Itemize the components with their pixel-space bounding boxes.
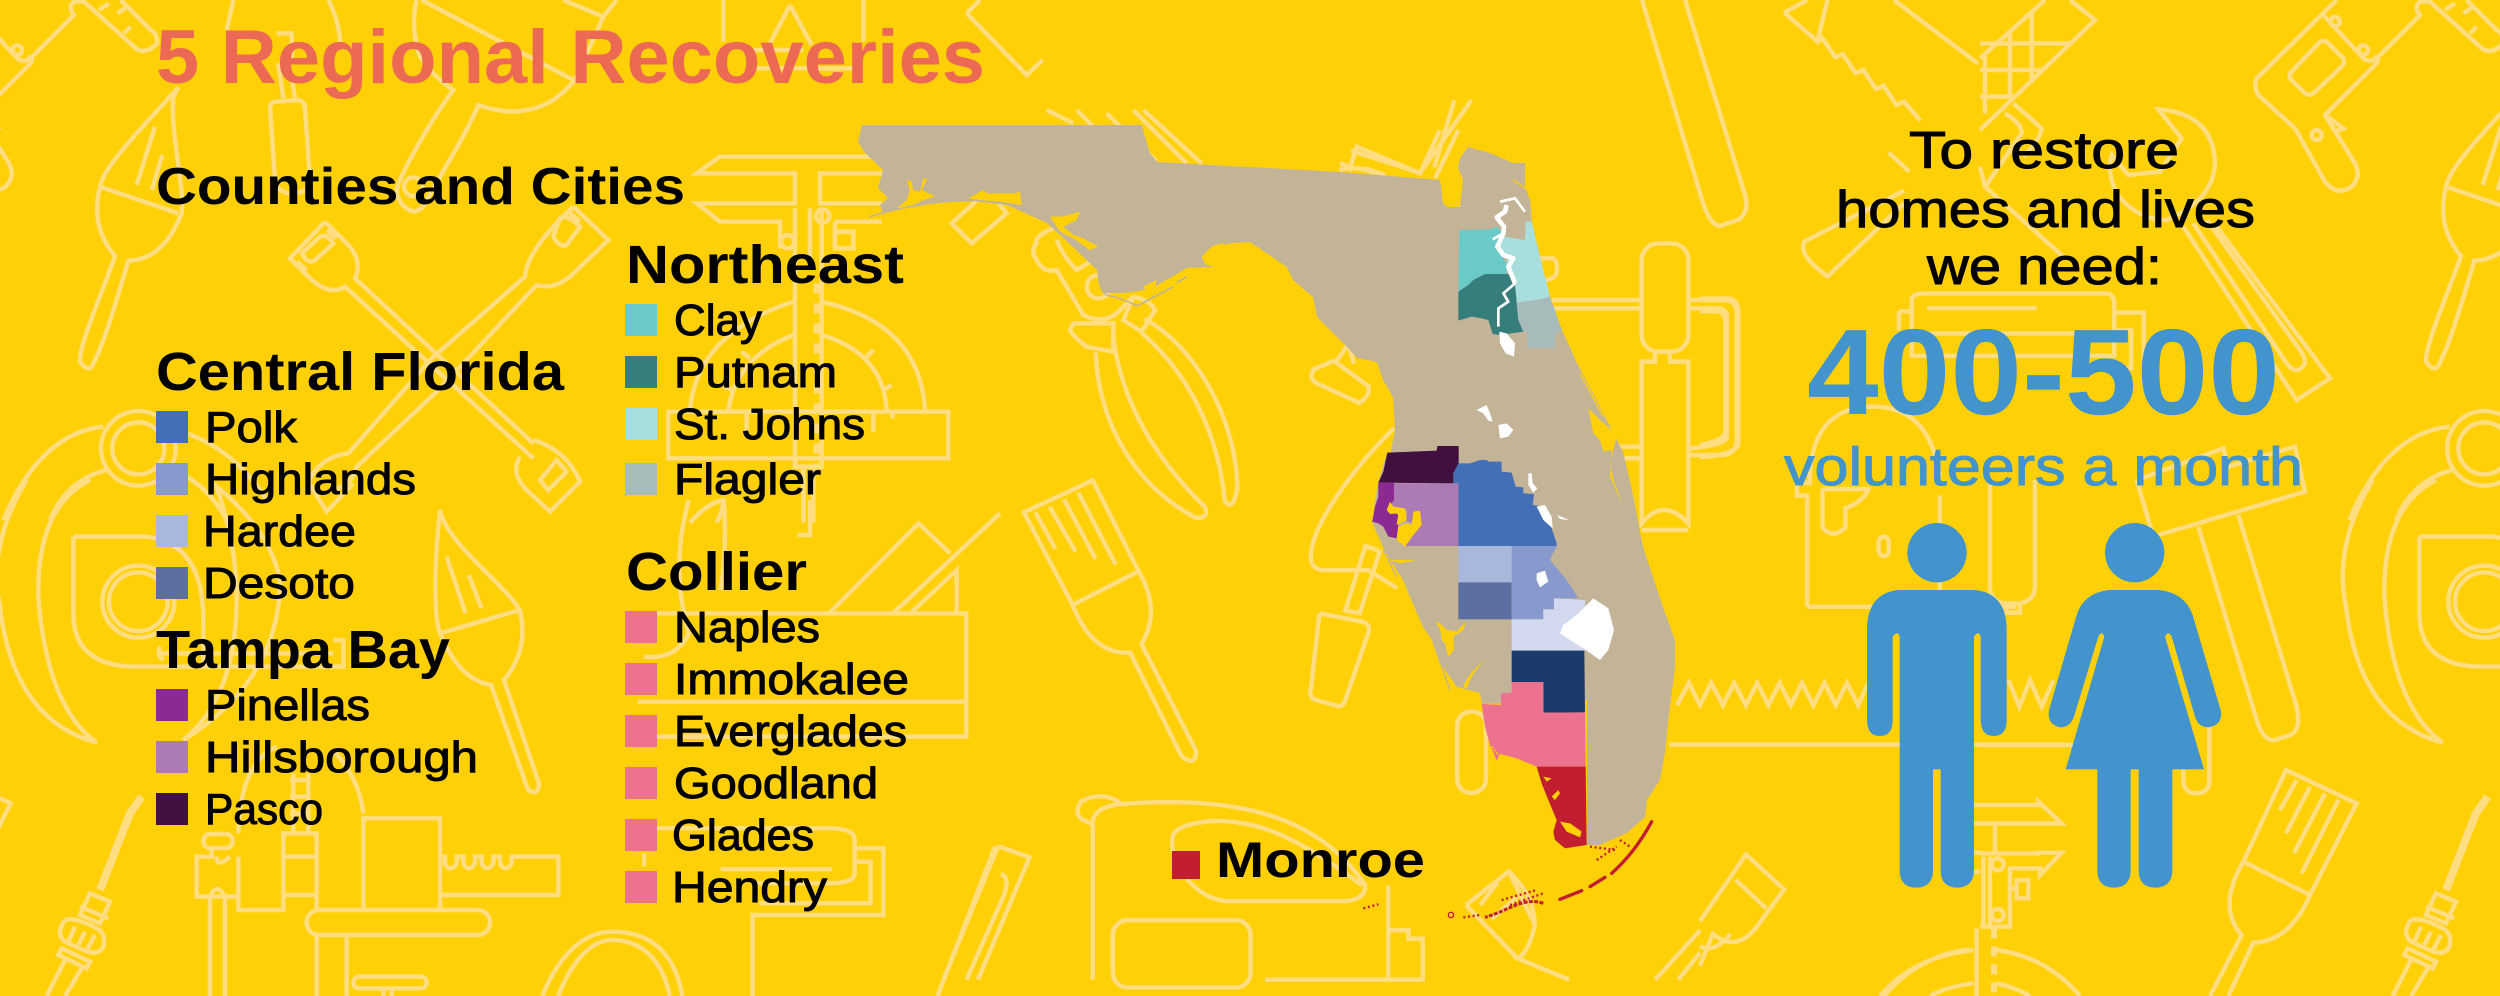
crossed tools xyxy=(290,222,533,458)
repeat of the tile at left edge xyxy=(0,0,157,996)
tools: roller, caliper and brush at lower right xyxy=(1880,447,2357,996)
legend: Collier: Goodland xyxy=(674,759,878,808)
legend: Central Florida xyxy=(156,342,565,608)
legend: Collier: Hendry xyxy=(672,863,827,912)
repeat of the tile at right edge xyxy=(2343,0,2500,996)
saw handle grid xyxy=(1980,0,2095,130)
St. Johns River xyxy=(1497,205,1515,283)
county: Polk xyxy=(1453,460,1557,546)
Lake George xyxy=(1499,332,1515,357)
tools: trowel and toolbox xyxy=(435,500,1000,996)
round tool: upper ring and arcs xyxy=(101,411,176,486)
legend: Collier: Glades xyxy=(672,811,814,860)
tools: caliper and protractor xyxy=(668,0,1043,523)
county: Hillsborough xyxy=(1388,483,1458,546)
map: northeast counties xyxy=(1458,198,1562,493)
tools: round tool at left xyxy=(0,480,558,996)
county: Pinellas xyxy=(1372,483,1398,538)
county: Flagler xyxy=(1517,297,1562,348)
map: panhandle bays xyxy=(870,178,1227,306)
legend: Collier: Everglades xyxy=(674,707,907,756)
Collier and Monroe coast stipple xyxy=(1492,747,1536,769)
county: Hardee xyxy=(1458,546,1512,582)
legend: Central Florida: Desoto xyxy=(203,559,355,608)
call to action text: To restore xyxy=(1909,122,2179,180)
county: Desoto xyxy=(1458,582,1512,619)
call to action text xyxy=(1836,122,2255,296)
clamp xyxy=(203,834,233,848)
legend: Collier: Collier xyxy=(626,542,807,602)
map: east coast lagoons xyxy=(1513,180,1623,507)
legend: Central Florida: Central Florida xyxy=(156,342,565,402)
drill xyxy=(2255,0,2378,191)
legend: Northeast: St. Johns xyxy=(674,400,865,449)
Lake Okeechobee xyxy=(1560,598,1614,660)
county: St. Johns xyxy=(1497,222,1550,303)
legend: Collier: Naples xyxy=(674,603,820,652)
diamond tool head xyxy=(1466,871,1700,980)
legend: Northeast: Northeast xyxy=(626,235,904,295)
map: state outline xyxy=(858,125,1675,845)
tools: saw, wrench, drill xyxy=(1980,0,2500,400)
sander xyxy=(1077,796,1365,980)
legend: Tampa Bay: Pasco xyxy=(205,785,323,834)
volunteers a month: volunteers a month xyxy=(1784,437,2303,497)
tools: centre xyxy=(944,100,1700,988)
subheading: counties and cities: Counties and Cities xyxy=(156,158,685,216)
tool: hammer handle xyxy=(1642,0,1746,226)
call to action text: we need: xyxy=(1926,238,2162,296)
legend: Northeast xyxy=(625,235,904,504)
Florida map xyxy=(858,125,1675,918)
Monroe label: Monroe xyxy=(1216,832,1425,888)
second brush xyxy=(397,0,617,212)
county: Collier xyxy=(1482,682,1586,767)
legend: Tampa Bay: Pinellas xyxy=(205,681,370,730)
legend: Central Florida: Polk xyxy=(205,403,298,452)
county: Glades xyxy=(1512,598,1585,651)
county: Hendry xyxy=(1512,651,1585,713)
tools: roller and handle right of map xyxy=(1340,130,1737,530)
county: Monroe xyxy=(1537,767,1587,848)
map: south and central counties xyxy=(1363,446,1652,918)
paint brush xyxy=(1024,480,1139,605)
tools: top left xyxy=(3,0,617,520)
central lakes xyxy=(1477,405,1537,493)
title: 5 Regional Recoveries xyxy=(156,15,985,100)
Florida Keys xyxy=(1560,822,1652,899)
drill bit xyxy=(100,797,142,890)
level xyxy=(944,846,1030,980)
legend: Tampa Bay xyxy=(156,620,478,834)
roller xyxy=(1311,344,1369,403)
tools: paint scraper, lock and saw blade xyxy=(1669,0,2144,996)
icon: woman xyxy=(2049,523,2221,888)
legend: Northeast: Flagler xyxy=(674,455,821,504)
tools: pliers xyxy=(952,110,1202,352)
legend: Collier: Immokalee xyxy=(674,655,909,704)
county: Putnam xyxy=(1458,274,1523,335)
trowel xyxy=(1311,428,1397,588)
Tampa Bay, Charlotte Harbor and Monroe inlets xyxy=(1387,502,1582,837)
legend: Central Florida: Highlands xyxy=(205,455,416,504)
county: Pasco xyxy=(1378,446,1459,483)
call to action text: homes and lives xyxy=(1836,181,2255,239)
legend: Northeast: Putnam xyxy=(674,348,837,397)
wrench xyxy=(2110,109,2215,220)
big number: 400-500: 400-500 xyxy=(1807,304,2280,440)
legend: Tampa Bay: Hillsborough xyxy=(205,733,478,782)
legend: Collier xyxy=(625,542,909,912)
county: Clay xyxy=(1458,227,1507,292)
lakes xyxy=(1537,505,1569,587)
icon: man xyxy=(1867,523,2007,888)
legend: Tampa Bay: Tampa Bay xyxy=(156,620,450,680)
legend: Central Florida: Hardee xyxy=(203,507,356,556)
county: Highlands xyxy=(1512,546,1578,619)
legend: Northeast: Clay xyxy=(674,296,762,345)
